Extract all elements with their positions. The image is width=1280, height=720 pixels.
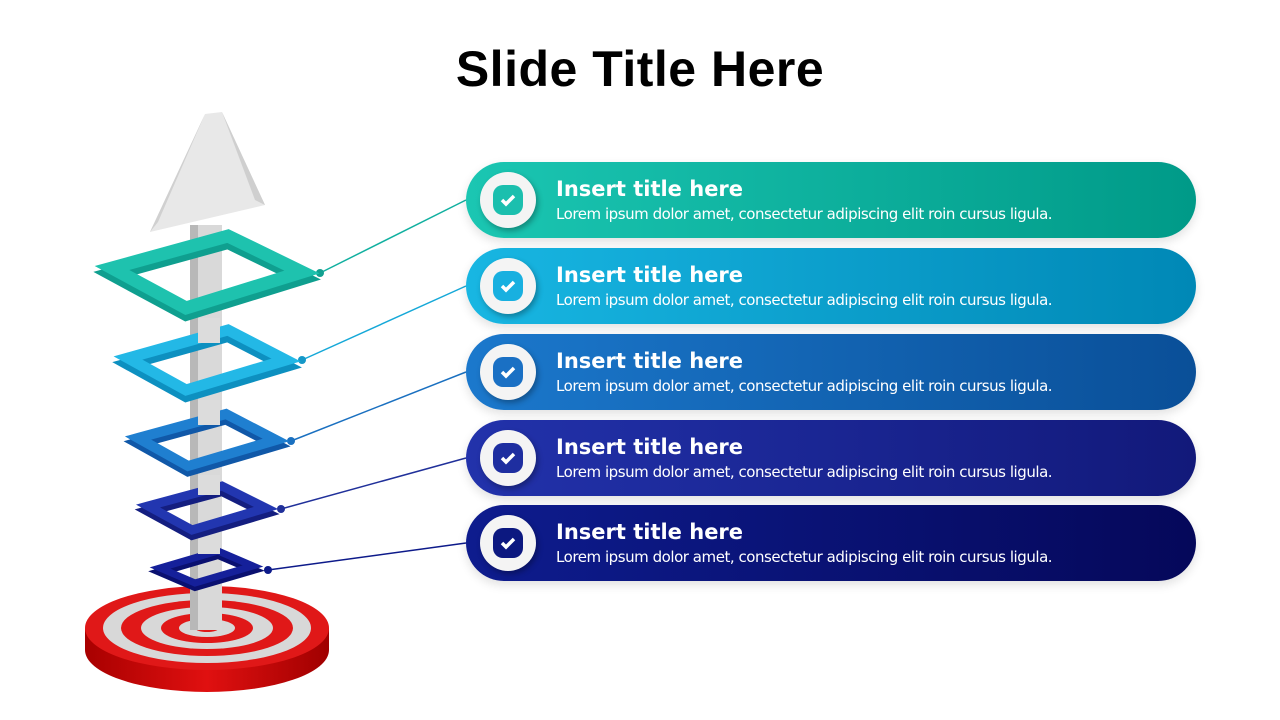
arrow — [150, 112, 265, 630]
shaft front over rings — [198, 318, 220, 343]
bar 5: Lorem ipsum dolor amet, consectetur adipiscing elit roin cursus ligula. — [556, 548, 1052, 566]
bar 4 — [466, 420, 1196, 496]
bar 5: Insert title here — [556, 520, 743, 544]
icon: check 5 — [480, 515, 536, 571]
bar 1: Lorem ipsum dolor amet, consectetur adipiscing elit roin cursus ligula. — [556, 205, 1052, 223]
text 2 — [556, 263, 1052, 309]
bar 2: Insert title here — [556, 263, 743, 287]
connector lines — [264, 200, 466, 574]
bar 3: Lorem ipsum dolor amet, consectetur adipiscing elit roin cursus ligula. — [556, 377, 1052, 395]
bar 5 — [466, 505, 1196, 581]
text 3 — [556, 349, 1052, 395]
bar 4: Insert title here — [556, 435, 743, 459]
bar 2: Lorem ipsum dolor amet, consectetur adipiscing elit roin cursus ligula. — [556, 291, 1052, 309]
graphic: arrow through rings into target — [85, 112, 466, 692]
text 4 — [556, 435, 1052, 481]
bar 2 — [466, 248, 1196, 324]
icon: check 1 — [480, 172, 536, 228]
rings — [112, 236, 302, 587]
text 5 — [556, 520, 1052, 566]
icon: check 2 — [480, 258, 536, 314]
icon: check 3 — [480, 344, 536, 400]
text 1 — [556, 177, 1052, 223]
bar 4: Lorem ipsum dolor amet, consectetur adipiscing elit roin cursus ligula. — [556, 463, 1052, 481]
icon: check 4 — [480, 430, 536, 486]
bar 3: Insert title here — [556, 349, 743, 373]
bar 3 — [466, 334, 1196, 410]
title: Slide Title Here — [456, 41, 824, 97]
bar 1: Insert title here — [556, 177, 743, 201]
target — [85, 586, 329, 692]
bar 1 — [466, 162, 1196, 238]
